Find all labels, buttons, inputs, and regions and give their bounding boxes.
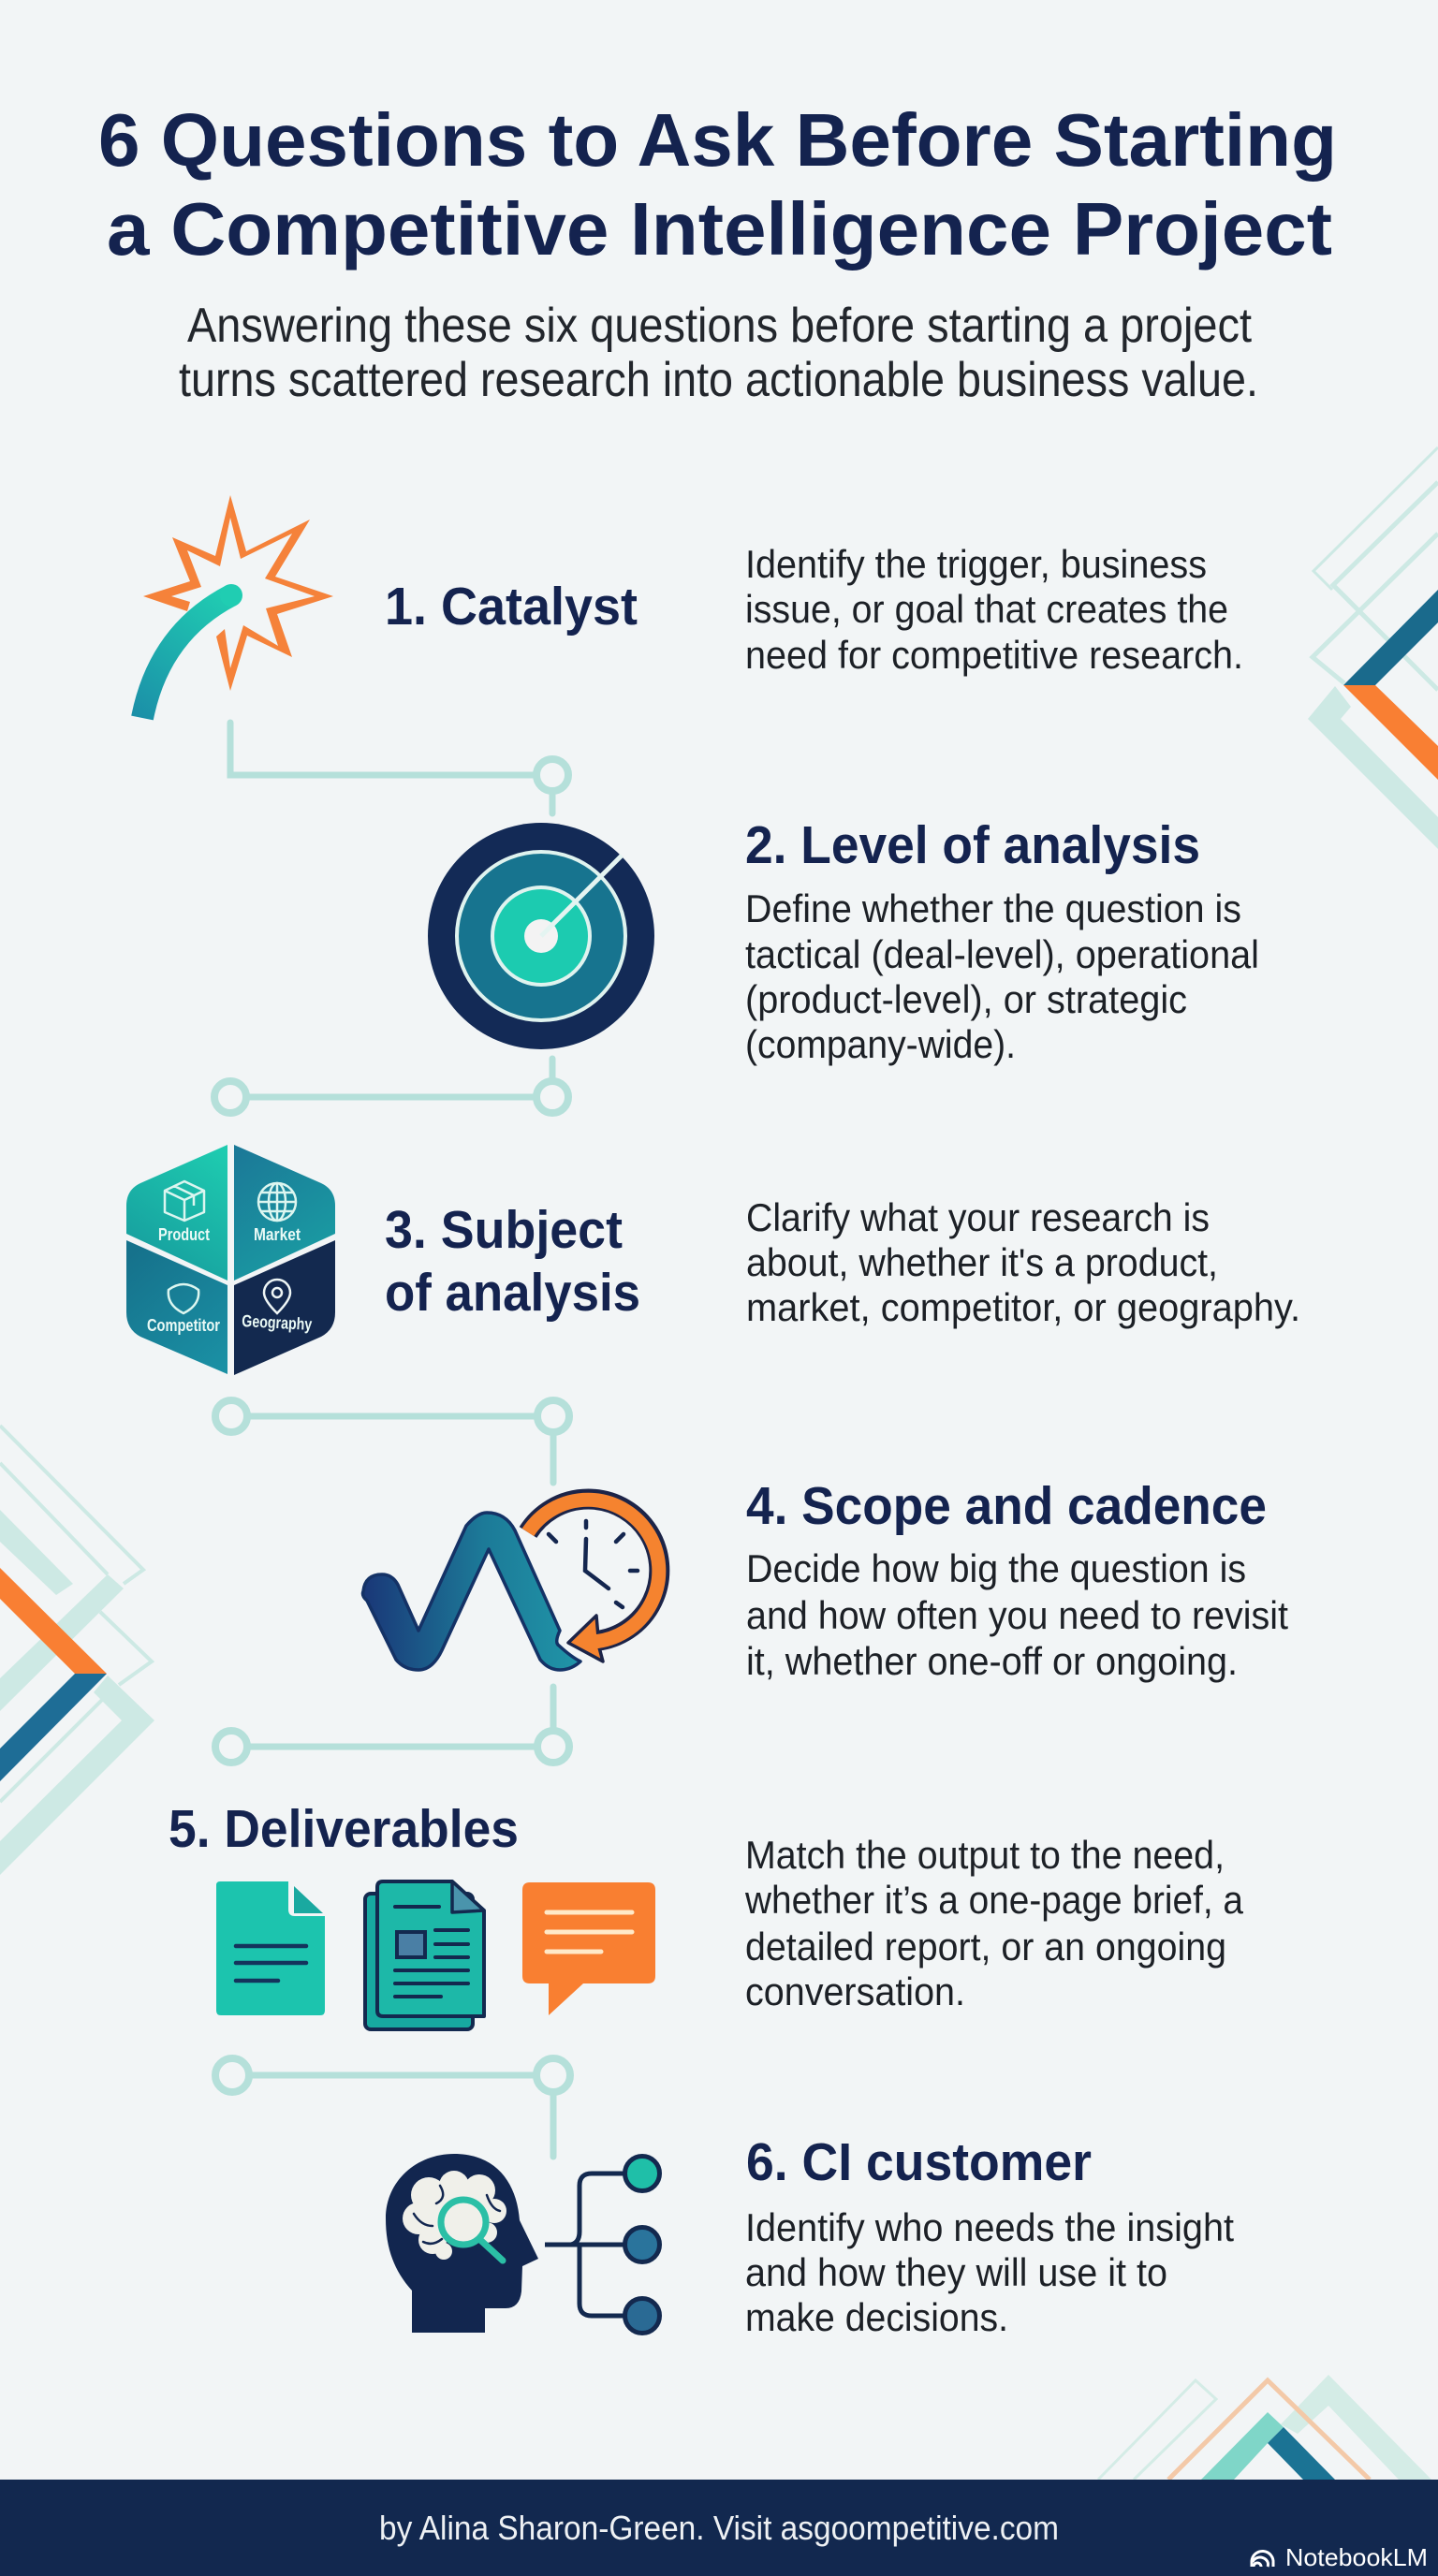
text: scope description: and how often you need to revisit (746, 1593, 1288, 1637)
icon: shield (169, 1284, 198, 1313)
text: catalyst description: need for competitive research. (745, 633, 1243, 677)
tree lines (545, 2174, 625, 2316)
text: scope description (746, 1546, 1288, 1683)
label: competitor: Competitor (147, 1316, 220, 1335)
NotebookLM wordmark: NotebookLM (1285, 2543, 1428, 2571)
icon: NotebookLM logo (1252, 2551, 1273, 2567)
title (98, 98, 1337, 271)
heading 4: 4. Scope and cadence (746, 1476, 1267, 1536)
text: subject description: Clarify what your research is (746, 1195, 1210, 1239)
clock ticks and hands (549, 1521, 638, 1607)
heading 1: 1. Catalyst (385, 577, 638, 637)
text: deliverables description (744, 1833, 1244, 2013)
icon: target (428, 823, 654, 1049)
icon: conversation bubble (522, 1882, 655, 2015)
wave (363, 1513, 580, 1670)
footer bar (0, 2480, 1438, 2576)
cadence arc outline (528, 1499, 659, 1641)
text: level description: tactical (deal-level), operational (745, 932, 1259, 976)
head (386, 2154, 538, 2333)
text: level description: Define whether the question is (745, 886, 1241, 930)
heading 2: 2. Level of analysis (745, 815, 1200, 875)
decoration: left chevrons (0, 1426, 154, 1875)
text: deliverables description: whether it’s a one-page brief, a (744, 1878, 1244, 1922)
icon: pin (264, 1280, 290, 1313)
title: a Competitive Intelligence Project (107, 187, 1332, 271)
text: customer description: Identify who needs the insight (745, 2205, 1234, 2249)
brain (403, 2171, 506, 2260)
subtitle: turns scattered research into actionable business value. (179, 353, 1258, 407)
decoration: right chevrons (1308, 447, 1438, 849)
text: customer description: and how they will use it to (745, 2250, 1167, 2294)
icon: subject hexagon (126, 1145, 335, 1375)
connector 2 to 3 (214, 1059, 568, 1113)
text: deliverables description: detailed report, or an ongoing (745, 1925, 1226, 1969)
title: 6 Questions to Ask Before Starting (98, 98, 1337, 182)
text: customer description (745, 2205, 1234, 2339)
text: level description: (product-level), or strategic (745, 977, 1187, 1021)
heading 5: 5. Deliverables (169, 1799, 519, 1859)
icon: scope wave and clock (363, 1499, 659, 1670)
icon: catalyst spark (142, 495, 333, 718)
heading 3: of analysis (385, 1263, 640, 1323)
cadence arc fill (528, 1500, 659, 1642)
heading 3: 3. Subject (385, 1200, 623, 1260)
text: subject description: market, competitor, or geography. (746, 1285, 1300, 1329)
connector 1 to 2 (230, 723, 568, 813)
magnifier (479, 2239, 503, 2261)
text: scope description: it, whether one-off or ongoing. (746, 1639, 1238, 1683)
text: subject description: about, whether it's a product, (746, 1240, 1218, 1284)
footer credit: by Alina Sharon-Green. Visit asgoompetitive.com (379, 2509, 1059, 2547)
arrowhead (568, 1616, 603, 1661)
label: geography: Geography (242, 1311, 313, 1334)
connector 4 to 5 (215, 1687, 569, 1763)
tree nodes (625, 2157, 659, 2190)
connector 3 to 4 (215, 1400, 569, 1483)
text: level description (745, 886, 1259, 1066)
text: subject description (746, 1195, 1300, 1329)
text: catalyst description: issue, or goal that creates the (745, 587, 1228, 631)
text: scope description: Decide how big the question is (746, 1546, 1246, 1590)
icon: box (165, 1181, 204, 1221)
text: deliverables description: conversation. (745, 1969, 965, 2013)
label: product: Product (158, 1225, 210, 1244)
subtitle: Answering these six questions before starting a project (187, 299, 1252, 353)
icon: globe (258, 1183, 296, 1221)
heading 3 (385, 1200, 640, 1323)
text: deliverables description: Match the output to the need, (745, 1833, 1225, 1877)
heading 6: 6. CI customer (746, 2132, 1092, 2192)
text: catalyst description (745, 542, 1243, 677)
connector 5 to 6 (215, 2058, 570, 2157)
subtitle (179, 299, 1258, 407)
icon: one-page document (216, 1881, 325, 2015)
text: level description: (company-wide). (745, 1022, 1016, 1066)
text: catalyst description: Identify the trigger, business (745, 542, 1207, 586)
text: customer description: make decisions. (745, 2295, 1008, 2339)
icon: detailed report (365, 1881, 484, 2029)
decoration: bottom-right chevrons (1098, 2375, 1431, 2480)
label: market: Market (254, 1225, 301, 1244)
icon: customer head with tree (386, 2154, 659, 2333)
